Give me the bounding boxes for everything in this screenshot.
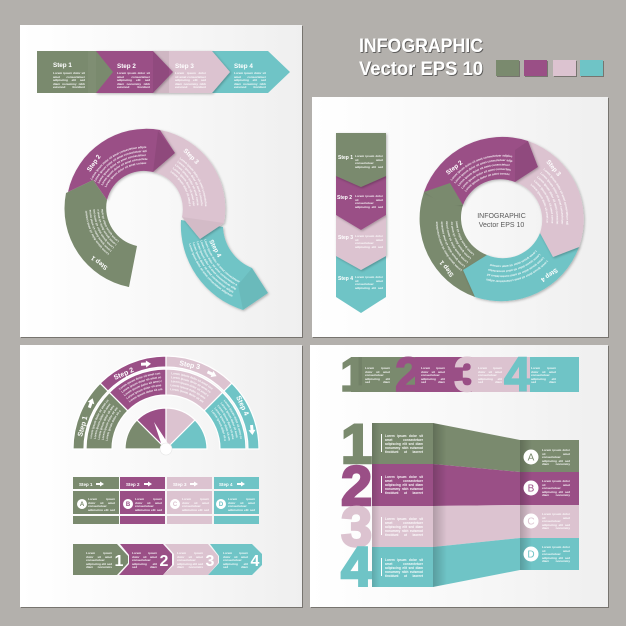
semicircle gauge [74, 356, 260, 456]
donut chart: Lorem ipsum dolor sit amet consectetuer adipiscing elit sed diam nonummy nibh euismod [450, 154, 512, 181]
semicircle gauge: Step 4 [234, 395, 249, 417]
spiral arrow chart: Lorem ipsum dolor sit amet consectetuer adipiscing elit sed diam nonummy nibh euismod [204, 239, 240, 282]
vertical chevron ribbon: Step 4 [338, 276, 353, 282]
spiral arrow chart: Lorem ipsum dolor sit amet consectetuer adipiscing elit sed diam nonummy nibh euismod [85, 210, 109, 256]
donut chart: Lorem ipsum dolor sit amet consectetuer adipiscing elit sed diam nonummy nibh euismod [530, 184, 548, 223]
spiral arrow chart: Step 2 [86, 153, 103, 173]
folded ribbon bars: 3 [341, 495, 372, 558]
puzzle number bar: 1 [340, 349, 367, 402]
icon: gauge arrows [86, 360, 256, 435]
semicircle gauge: Lorem ipsum dolor sit amet consectetuer adipiscing elit sed diam nonummy nibh [0, 0, 235, 440]
donut chart: Lorem ipsum dolor sit amet consectetuer adipiscing elit sed diam nonummy nibh euismod [537, 176, 558, 224]
donut chart: Lorem ipsum dolor sit amet consectetuer adipiscing elit sed diam nonummy nibh euismod [544, 168, 568, 225]
panel: numbered bars and fold [310, 345, 609, 608]
semicircle gauge: Lorem ipsum dolor sit amet consectetuer adipiscing elit sed diam nonummy nibh [0, 0, 227, 441]
vertical chevron ribbon: Step 2 [337, 195, 352, 201]
colour swatches [496, 60, 604, 77]
title [359, 36, 483, 80]
gauge needle [154, 422, 172, 455]
semicircle gauge: Lorem ipsum dolor sit amet consectetuer adipiscing elit sed diam nonummy nibh [0, 0, 205, 404]
donut chart: Lorem ipsum dolor sit amet consectetuer adipiscing elit sed diam nonummy nibh euismod [540, 172, 564, 224]
horizontal step arrows: Step 2 [117, 63, 136, 70]
numbered arrows: 3 [206, 553, 215, 570]
puzzle number bar: 3 [454, 349, 481, 402]
donut chart: Lorem ipsum dolor sit amet consectetuer adipiscing elit sed diam nonummy nibh euismod [488, 254, 541, 272]
donut chart: Step 1 [438, 258, 456, 278]
step table: D [219, 502, 224, 508]
semicircle gauge: Lorem ipsum dolor sit amet consectetuer adipiscing elit sed diam nonummy nibh [0, 0, 162, 394]
spiral arrow chart: Lorem ipsum dolor sit amet consectetuer adipiscing elit sed diam nonummy nibh euismod [192, 242, 234, 293]
step table [73, 477, 259, 524]
horizontal step arrows: Step 4 [234, 63, 253, 70]
spiral arrow chart: Lorem ipsum dolor sit amet consectetuer adipiscing elit sed diam nonummy nibh euismod [98, 154, 146, 184]
spiral arrow chart: Lorem ipsum dolor sit amet consectetuer adipiscing elit sed diam nonummy nibh euismod [93, 209, 114, 249]
donut chart: Lorem ipsum dolor sit amet consectetuer adipiscing elit sed diam nonummy nibh euismod [461, 168, 511, 189]
lettered circles: B [528, 484, 535, 494]
semicircle gauge: Lorem ipsum dolor sit amet consectetuer adipiscing elit sed diam nonummy nibh [0, 0, 122, 441]
spiral arrow chart: Lorem ipsum dolor sit amet consectetuer adipiscing elit sed diam nonummy nibh euismod [170, 170, 191, 206]
spiral arrow chart: Lorem ipsum dolor sit amet consectetuer adipiscing elit sed diam nonummy nibh euismod [189, 243, 232, 297]
vertical chevron ribbon: Step 3 [338, 235, 353, 241]
donut centre label: INFOGRAPHIC [477, 213, 526, 220]
donut chart: Lorem ipsum dolor sit amet consectetuer adipiscing elit sed diam nonummy nibh euismod [456, 221, 474, 256]
semicircle gauge: Lorem ipsum dolor sit amet consectetuer adipiscing elit sed diam nonummy nibh [0, 0, 112, 439]
spiral arrow chart: Lorem ipsum dolor sit amet consectetuer adipiscing elit sed diam nonummy nibh euismod [175, 164, 198, 206]
donut chart: Lorem ipsum dolor sit amet consectetuer adipiscing elit sed diam nonummy nibh euismod [534, 180, 553, 224]
horizontal step arrows: Step 1 [53, 62, 72, 69]
semicircle gauge: Step 3 [179, 360, 201, 371]
donut chart: Lorem ipsum dolor sit amet consectetuer adipiscing elit sed diam nonummy nibh euismod [440, 222, 465, 268]
title: INFOGRAPHIC [359, 36, 483, 57]
spiral arrow chart: Step 3 [182, 147, 200, 166]
donut centre label [477, 213, 526, 229]
puzzle number bar [340, 349, 579, 402]
semicircle gauge: Lorem ipsum dolor sit amet consectetuer adipiscing elit sed diam nonummy nibh [0, 0, 210, 398]
spiral arrow chart: Lorem ipsum dolor sit amet consectetuer adipiscing elit sed diam nonummy nibh euismod [180, 158, 206, 206]
lettered circles [524, 450, 538, 562]
horizontal step arrows [37, 51, 290, 93]
folded ribbon bars: 1 [341, 412, 372, 475]
spiral arrow chart: Lorem ipsum dolor sit amet consectetuer adipiscing elit sed diam nonummy nibh euismod [104, 162, 146, 188]
donut chart: Lorem ipsum dolor sit amet consectetuer adipiscing elit sed diam nonummy nibh euismod [490, 250, 537, 268]
spiral arrow chart: Lorem ipsum dolor sit amet consectetuer adipiscing elit sed diam nonummy nibh euismod [200, 240, 237, 286]
icon: table arrows [96, 482, 245, 486]
spiral arrow chart: Step 4 [207, 239, 223, 259]
donut chart: Lorem ipsum dolor sit amet consectetuer adipiscing elit sed diam nonummy nibh euismod [486, 257, 544, 278]
vertical chevron ribbon [336, 133, 386, 313]
semicircle gauge: Lorem ipsum dolor sit amet consectetuer adipiscing elit sed diam nonummy nibh [0, 0, 161, 391]
semicircle gauge: Lorem ipsum dolor sit amet consectetuer adipiscing elit sed diam nonummy nibh [0, 0, 239, 439]
spiral arrow chart: Step 1 [90, 254, 109, 271]
semicircle gauge: Lorem ipsum dolor sit amet consectetuer adipiscing elit sed diam nonummy nibh [0, 0, 110, 439]
semicircle gauge: Lorem ipsum dolor sit amet consectetuer adipiscing elit sed diam nonummy nibh [128, 388, 162, 402]
spiral arrow chart: Lorem ipsum dolor sit amet consectetuer adipiscing elit sed diam nonummy nibh euismod [90, 146, 146, 180]
semicircle gauge: Lorem ipsum dolor sit amet consectetuer adipiscing elit sed diam nonummy nibh [0, 0, 119, 440]
step table: A [80, 502, 85, 508]
step table: C [173, 502, 178, 508]
title: Vector EPS 10 [359, 59, 483, 80]
spiral arrow chart: Lorem ipsum dolor sit amet consectetuer adipiscing elit sed diam nonummy nibh euismod [172, 167, 194, 206]
donut chart: Lorem ipsum dolor sit amet consectetuer adipiscing elit sed diam nonummy nibh euismod [458, 164, 510, 186]
horizontal step arrows: Step 3 [175, 63, 194, 70]
step table: Step 2 [126, 482, 140, 487]
semicircle gauge: Step 1 [77, 415, 89, 438]
lettered circles: C [527, 516, 535, 528]
donut chart: Lorem ipsum dolor sit amet consectetuer adipiscing elit sed diam nonummy nibh euismod [451, 222, 471, 260]
spiral arrow chart: Lorem ipsum dolor sit amet consectetuer adipiscing elit sed diam nonummy nibh euismod [94, 150, 146, 182]
spiral arrow chart: Lorem ipsum dolor sit amet consectetuer adipiscing elit sed diam nonummy nibh euismod [89, 210, 112, 252]
semicircle gauge: Lorem ipsum dolor sit amet consectetuer adipiscing elit sed diam nonummy nibh [0, 0, 214, 391]
numbered arrows: 2 [160, 553, 169, 570]
semicircle gauge: Lorem ipsum dolor sit amet consectetuer adipiscing elit sed diam nonummy nibh [0, 0, 243, 439]
semicircle gauge: Lorem ipsum dolor sit amet consectetuer adipiscing elit sed diam nonummy nibh [0, 0, 163, 397]
folded ribbon bars: 2 [341, 454, 372, 517]
spiral arrow chart [64, 128, 270, 312]
puzzle number bar: 2 [395, 349, 422, 402]
spiral arrow chart: Lorem ipsum dolor sit amet consectetuer adipiscing elit sed diam nonummy nibh euismod [97, 209, 116, 246]
spiral arrow chart: Lorem ipsum dolor sit amet consectetuer adipiscing elit sed diam nonummy nibh euismod [101, 158, 148, 186]
donut chart: Lorem ipsum dolor sit amet consectetuer adipiscing elit sed diam nonummy nibh euismod [464, 172, 510, 192]
panel: ribbon and donut [312, 97, 609, 338]
spiral arrow chart: Lorem ipsum dolor sit amet consectetuer adipiscing elit sed diam nonummy nibh euismod [196, 241, 236, 290]
folded ribbon bars [341, 412, 579, 598]
step table: Step 4 [219, 482, 233, 487]
donut chart: Lorem ipsum dolor sit amet consectetuer adipiscing elit sed diam nonummy nibh euismod [454, 159, 512, 184]
semicircle gauge: Lorem ipsum dolor sit amet consectetuer adipiscing elit sed diam nonummy nibh [0, 0, 207, 400]
donut chart: Step 4 [539, 266, 559, 283]
numbered arrows: 4 [251, 553, 260, 570]
vertical chevron ribbon: Step 1 [338, 155, 353, 161]
spiral arrow chart: Lorem ipsum dolor sit amet consectetuer adipiscing elit sed diam nonummy nibh euismod [177, 160, 203, 206]
panel: gauge, table and arrows [20, 345, 303, 608]
semicircle gauge: Lorem ipsum dolor sit amet consectetuer adipiscing elit sed diam nonummy nibh [0, 0, 212, 394]
lettered circles: A [528, 452, 535, 464]
semicircle gauge: Lorem ipsum dolor sit amet consectetuer adipiscing elit sed diam nonummy nibh [0, 0, 162, 400]
semicircle gauge: Step 2 [113, 367, 135, 382]
numbered arrows: 1 [115, 553, 124, 570]
donut centre label: Vector EPS 10 [479, 222, 524, 229]
lettered circles: D [527, 550, 535, 560]
donut chart: Lorem ipsum dolor sit amet consectetuer adipiscing elit sed diam nonummy nibh euismod [436, 222, 462, 272]
step table: Step 1 [79, 482, 93, 487]
step table: B [126, 502, 131, 508]
donut chart: Lorem ipsum dolor sit amet consectetuer adipiscing elit sed diam nonummy nibh euismod [486, 260, 548, 282]
semicircle gauge: Lorem ipsum dolor sit amet consectetuer adipiscing elit sed diam nonummy nibh [0, 0, 232, 441]
donut chart: Step 2 [445, 159, 465, 177]
numbered arrows [73, 544, 262, 575]
panel: arrows and spiral [20, 25, 303, 338]
donut chart: Step 3 [544, 159, 562, 178]
donut chart [420, 136, 586, 304]
semicircle gauge: Lorem ipsum dolor sit amet consectetuer adipiscing elit sed diam nonummy nibh [0, 0, 116, 440]
spiral arrow chart: Lorem ipsum dolor sit amet consectetuer adipiscing elit sed diam nonummy nibh euismod [101, 209, 119, 242]
step table: Step 3 [173, 482, 187, 487]
donut chart: Lorem ipsum dolor sit amet consectetuer adipiscing elit sed diam nonummy nibh euismod [446, 221, 468, 264]
puzzle number bar: 4 [504, 349, 531, 402]
folded ribbon bars: 4 [341, 535, 372, 598]
